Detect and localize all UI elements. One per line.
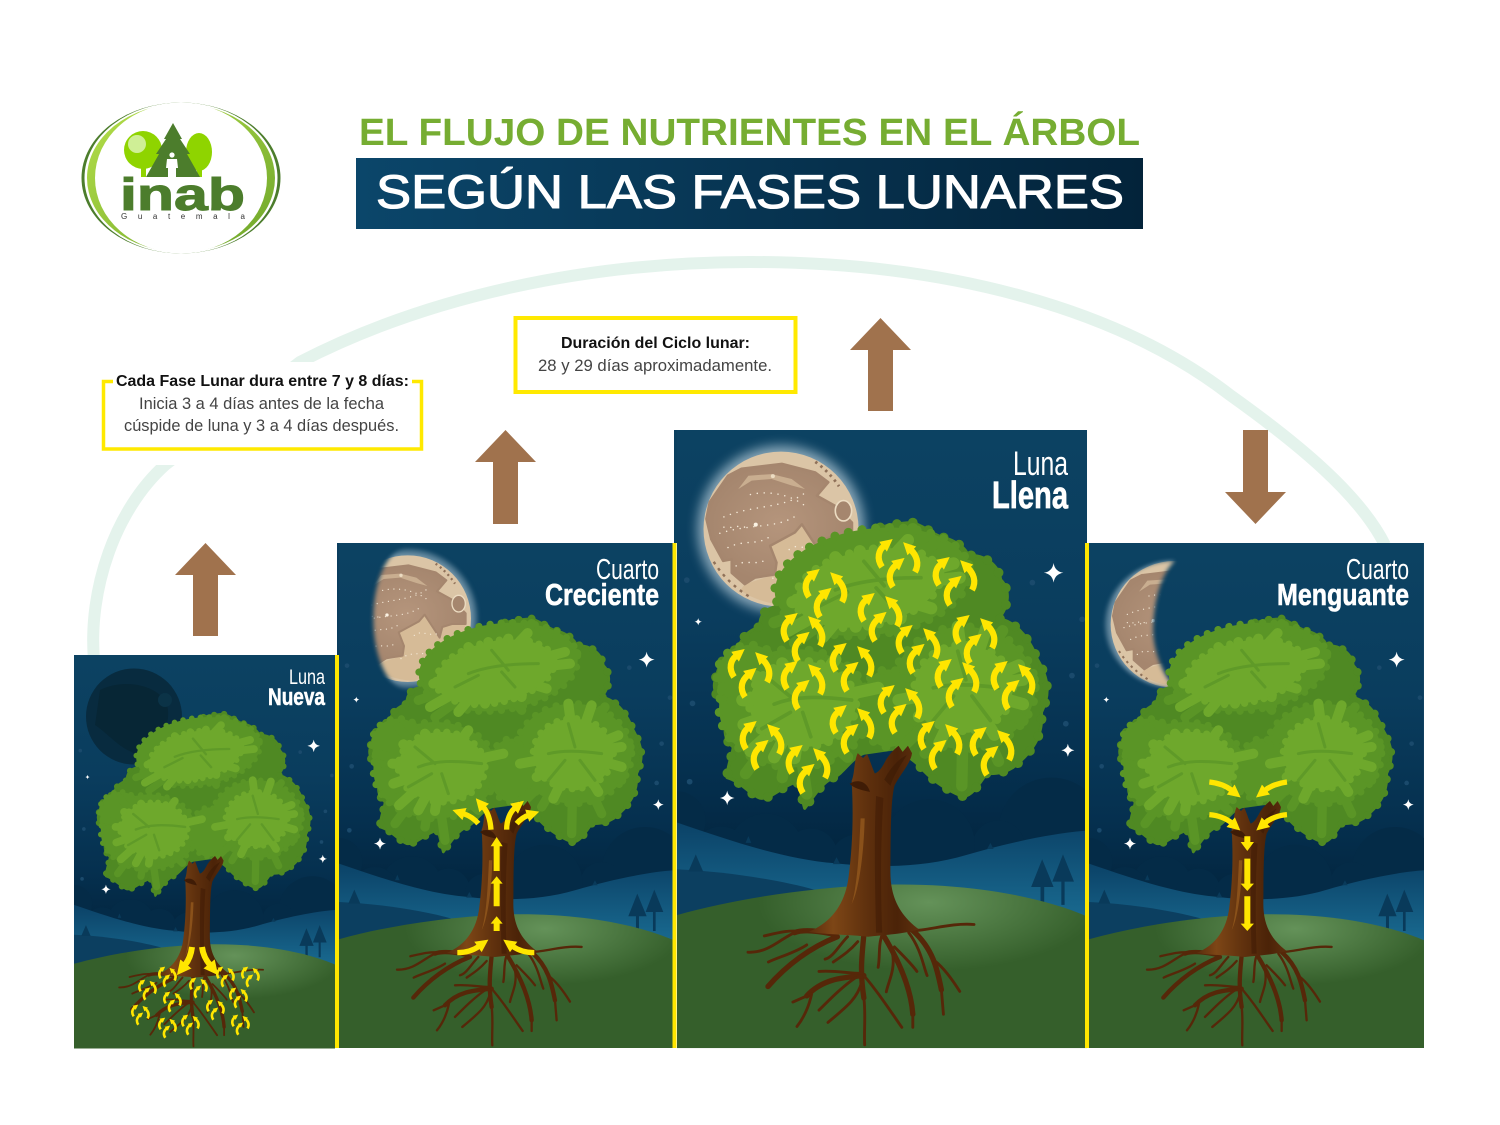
panel: cuarto menguante (1089, 543, 1424, 1048)
label: Cuarto Menguante: Cuarto (1346, 554, 1409, 586)
tree (98, 710, 310, 1046)
background arc (93, 262, 1385, 660)
panel: cuarto creciente (337, 543, 672, 1048)
yellow dividers (335, 543, 1089, 1048)
moon: waning crescent (1102, 558, 1176, 689)
logo subtitle: Guatemala (121, 212, 246, 221)
label: Cuarto Creciente (545, 554, 659, 612)
nutrient arrows: descending sap (1209, 782, 1287, 931)
tree (370, 613, 641, 1045)
label: Luna Llena (992, 445, 1069, 517)
arrow up: luna llena (850, 318, 911, 411)
moon: new moon (86, 668, 182, 764)
title (356, 110, 1143, 229)
tree (1120, 613, 1391, 1045)
scene: night landscape (647, 430, 1105, 1048)
logo wordmark: inab (120, 169, 245, 220)
label: Luna Llena: Llena (992, 475, 1069, 517)
label: Cuarto Creciente: Creciente (545, 577, 659, 612)
label: Cuarto Creciente: Cuarto (596, 554, 659, 586)
callout: cada fase lunar: cúspide de luna y 3 a 4 días después. (124, 417, 399, 435)
moon: waxing (370, 547, 480, 690)
label: Luna Nueva: Nueva (268, 684, 326, 711)
title line 1: EL FLUJO DE NUTRIENTES EN EL ÁRBOL (359, 110, 1140, 154)
label: Cuarto Menguante: Menguante (1277, 577, 1409, 612)
label: Luna Llena: Luna (1013, 445, 1068, 483)
arrow up: luna nueva (175, 543, 236, 636)
panel: luna llena (647, 430, 1105, 1048)
nutrient arrows: crown (731, 546, 1032, 793)
callout: cada fase lunar: Inicia 3 a 4 días antes de la fecha (139, 395, 385, 413)
panel edge strip (674, 430, 678, 543)
nutrient arrows: roots (132, 947, 259, 1038)
label: Luna Nueva (268, 666, 326, 711)
arrow up: cuarto creciente (475, 430, 536, 524)
callout: duración del ciclo lunar: 28 y 29 días aproximadamente. (538, 357, 772, 375)
callout: duración del ciclo lunar (516, 318, 796, 392)
logo trees (124, 123, 212, 177)
callout: cada fase lunar: Cada Fase Lunar dura entre 7 y 8 días: (116, 373, 409, 390)
callout: cada fase lunar (95, 362, 430, 465)
label: Cuarto Menguante (1277, 554, 1409, 612)
callout: duración del ciclo lunar: Duración del Ciclo lunar: (561, 335, 750, 352)
tree (714, 516, 1047, 1045)
moon: full (697, 446, 865, 613)
scene: night landscape (1064, 543, 1438, 1048)
nutrient arrows: rising sap (457, 807, 534, 953)
label: Luna Nueva: Luna (289, 666, 325, 689)
title banner (356, 158, 1143, 229)
logo: INAB Guatemala (82, 102, 280, 254)
panel edge strip (337, 543, 340, 655)
arrow down: cuarto menguante (1225, 430, 1286, 524)
scene: night landscape (314, 543, 688, 1048)
scene: night landscape (55, 655, 346, 1048)
title banner: SEGÚN LAS FASES LUNARES (376, 165, 1124, 218)
panel: luna nueva (55, 655, 346, 1048)
